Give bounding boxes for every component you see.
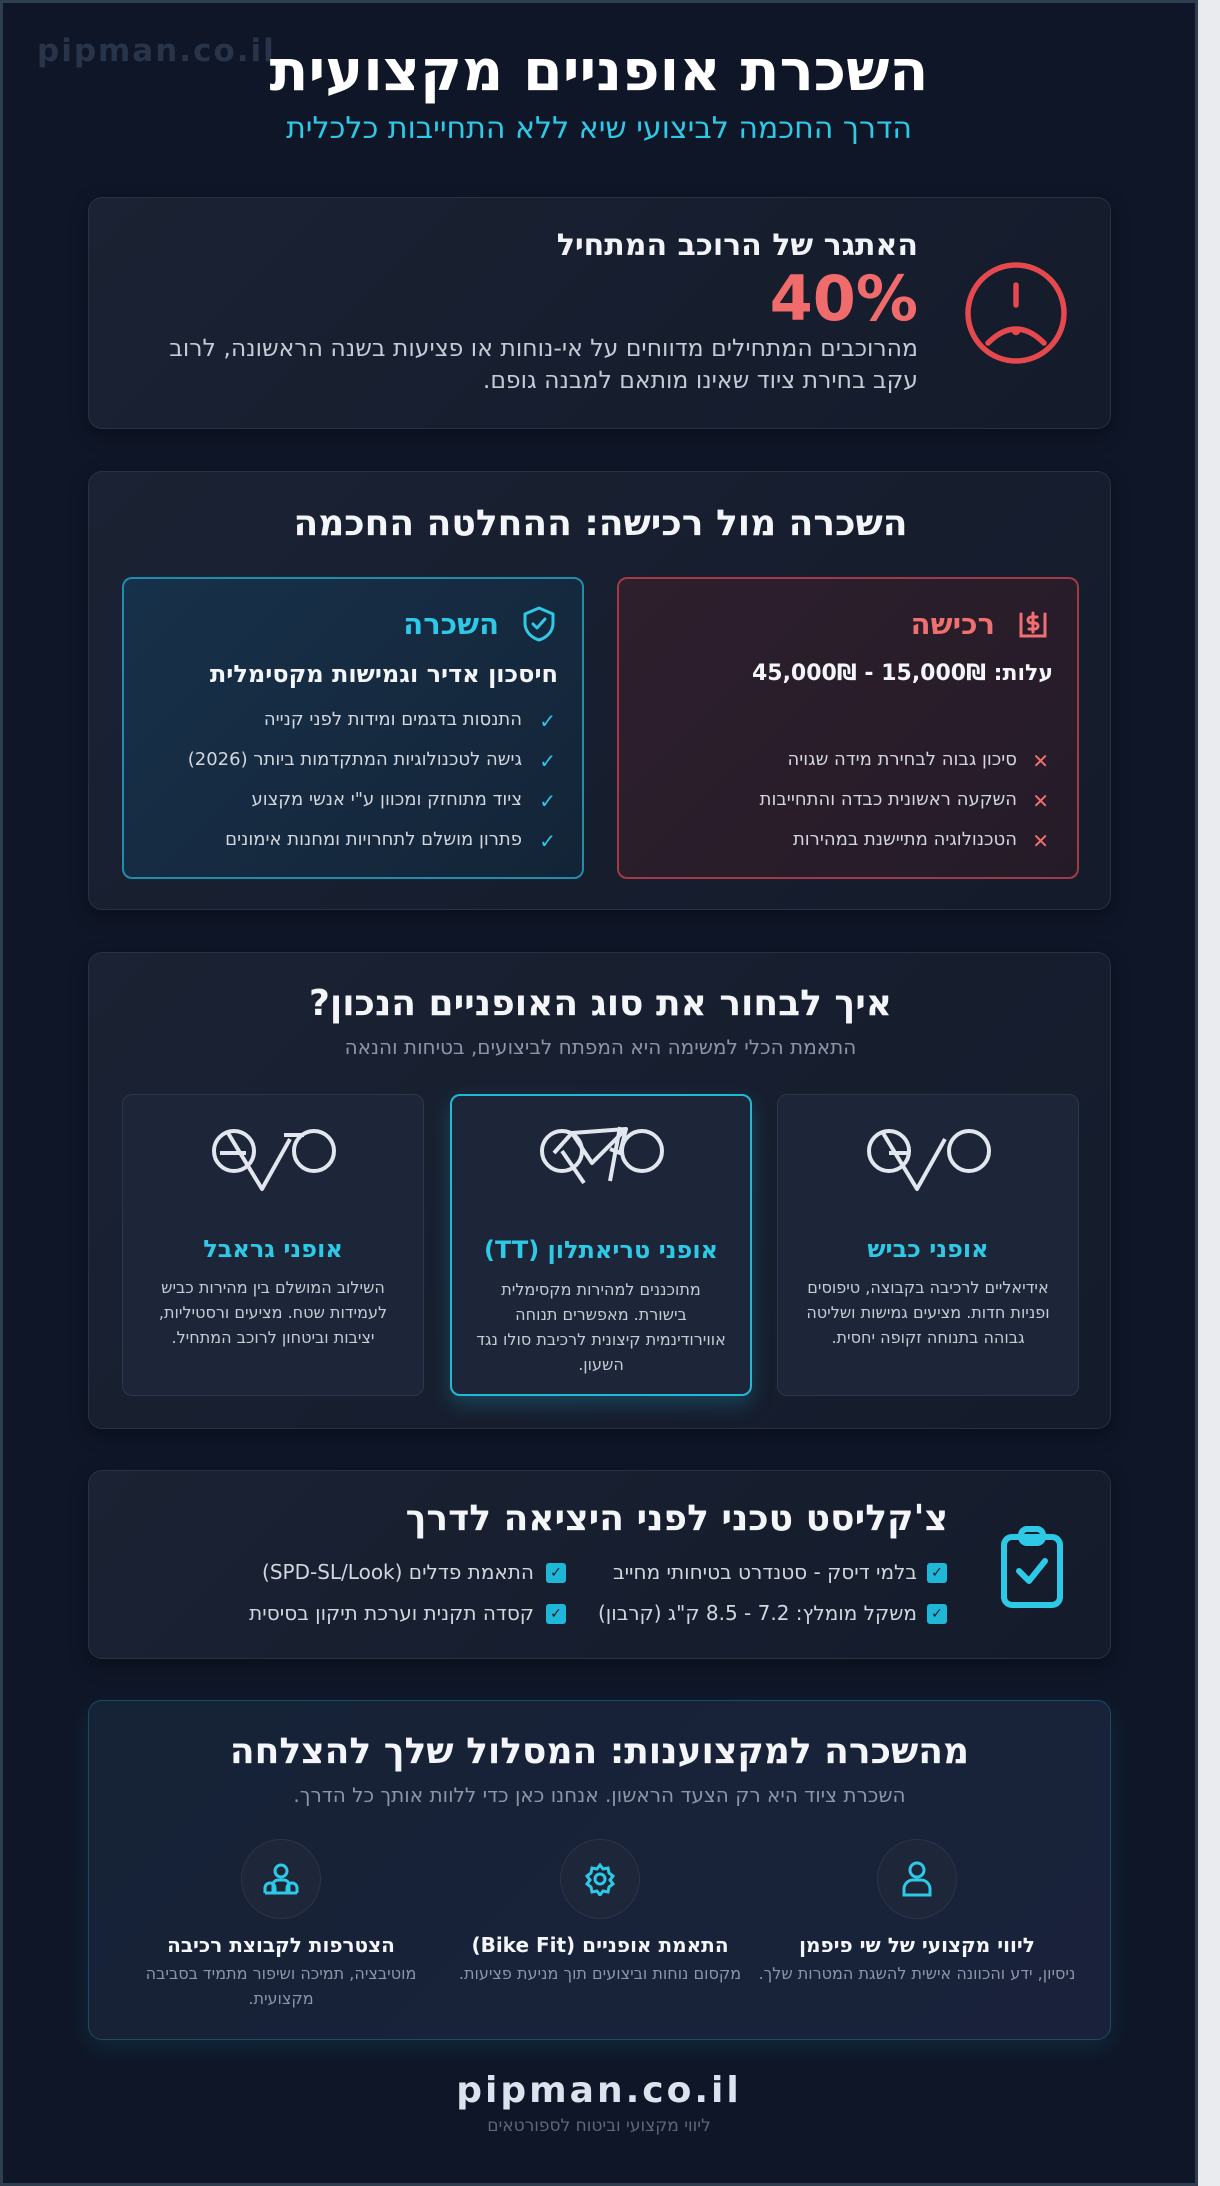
checklist items: ✓ [550,1606,562,1622]
box: buy [617,577,1079,879]
buy list: ✕ [1032,829,1049,853]
description: מהרוכבים המתחילים מדווחים על אי-נוחות או פציעות בשנה הראשונה, לרוב עקב בחירת ציוד שאינו מותאם למבנה גופם. [169,334,918,394]
icon: road bike [867,1129,991,1192]
card: gravel [122,1094,424,1396]
heading: צ'קליסט טכני לפני היציאה לדרך [406,1498,948,1539]
rent list: ✓ [539,709,556,733]
checklist items: קסדה תקנית וערכת תיקון בסיסית [249,1601,534,1625]
icon: warning face [965,262,1067,364]
footer tagline: ליווי מקצועי וביטוח לספורטאים [487,2116,711,2136]
buy list: סיכון גבוה לבחירת מידה שגויה [787,749,1017,770]
subheading: התאמת הכלי למשימה היא המפתח לביצועים, בטיחות והנאה [345,1035,856,1059]
rent list: ✓ [539,829,556,853]
rent header: השכרה [403,607,499,641]
icon: clipboard [1001,1526,1063,1608]
checklist items [249,1560,947,1625]
icon: gravel bike [212,1129,336,1192]
step: riding group: מוטיבציה, תמיכה ושיפור מתמיד בסביבה מקצועית. [146,1964,416,2008]
subheading: השכרת ציוד היא רק הצעד הראשון. אנחנו כאן כדי ללוות אותך כל הדרך. [293,1783,906,1807]
icon: shield [524,606,554,642]
icon: money bag [1020,612,1046,638]
buy header: רכישה [911,607,995,641]
name: אופני גראבל [203,1235,343,1263]
box: rent [122,577,584,879]
step: bike fit: מקסום נוחות וביצועים תוך מניעת פציעות. [459,1964,741,1983]
card: road [777,1094,1079,1396]
buy list: ✕ [1032,749,1049,773]
buy list: השקעה ראשונית כבדה והתחייבות [760,789,1017,810]
name: אופני כביש [867,1235,989,1263]
heading: מהשכרה למקצוענות: המסלול שלך להצלחה [230,1731,969,1772]
step: coaching: ליווי מקצועי של שי פיפמן [799,1933,1035,1957]
rent list: ✓ [539,749,556,773]
checklist items: משקל מומלץ: 7.2 - 8.5 ק"ג (קרבון) [598,1601,917,1625]
panel: bike types [88,952,1111,1429]
title: השכרת אופניים מקצועית [270,38,928,104]
rent list: ציוד מתוחזק ומכוון ע"י אנשי מקצוע [251,789,522,810]
rent list: ✓ [539,789,556,813]
icon: TT bike [540,1126,664,1184]
step: bike fit [459,1839,741,1983]
stat 40%: 40% [770,262,918,335]
rent subheading: חיסכון אדיר וגמישות מקסימלית [210,660,558,688]
description: אידיאליים לרכיבה בקבוצה, טיפוסים ופניות חדות. מציעים גמישות ושליטה גבוהה בתנוחה זקופה יחסית. [806,1278,1050,1347]
checklist items: ✓ [931,1606,943,1622]
heading: איך לבחור את סוג האופניים הנכון? [309,983,892,1024]
buy list: ✕ [1032,789,1049,813]
description: מתוכננים למהירות מקסימלית בישורת. מאפשרים תנוחה אווירודינמית קיצונית לרכיבת סולו נגד השעון. [476,1280,726,1374]
panel: rent vs buy [88,471,1111,910]
cost: עלות: 15,000₪ - 45,000₪ [752,661,1053,686]
description: השילוב המושלם בין מהירות כביש לעמידות שטח. מציעים ורסטיליות, יציבות וביטחון לרוכב המתחיל. [159,1278,387,1347]
checklist items: בלמי דיסק - סטנדרט בטיחותי מחייב [613,1560,917,1584]
rent list [188,709,556,853]
step: coaching: ניסיון, ידע והכוונה אישית להשגת המטרות שלך. [759,1964,1075,1983]
step: riding group [146,1839,416,2008]
checklist items: התאמת פדלים (SPD-SL/Look) [262,1560,534,1584]
step: riding group: הצטרפות לקבוצת רכיבה [167,1933,395,1957]
card: triathlon [450,1094,752,1396]
step: bike fit: התאמת אופניים (Bike Fit) [471,1933,729,1957]
rent list: פתרון מושלם לתחרויות ומחנות אימונים [225,829,522,850]
icon: person [877,1839,957,1919]
name: אופני טריאתלון (TT) [484,1236,718,1264]
heading: השכרה מול רכישה: ההחלטה החכמה [293,503,908,544]
panel: beginner challenge [88,197,1111,429]
checklist items: ✓ [931,1565,943,1581]
step: coaching [759,1839,1075,1983]
icon: gear [560,1839,640,1919]
rent list: התנסות בדגמים ומידות לפני קנייה [264,709,522,730]
buy list: הטכנולוגיה מתיישנת במהירות [793,829,1017,850]
buy list [760,749,1049,853]
heading: האתגר של הרוכב המתחיל [557,228,918,263]
footer logo: pipman.co.il [456,2070,742,2111]
subtitle: הדרך החכמה לביצועי שיא ללא התחייבות כלכלית [286,111,912,146]
icon: group [241,1839,321,1919]
panel: path to success [88,1700,1111,2040]
panel: technical checklist [88,1470,1111,1659]
rent list: גישה לטכנולוגיות המתקדמות ביותר (2026) [188,749,522,770]
watermark: pipman.co.il [37,33,276,69]
checklist items: ✓ [550,1565,562,1581]
